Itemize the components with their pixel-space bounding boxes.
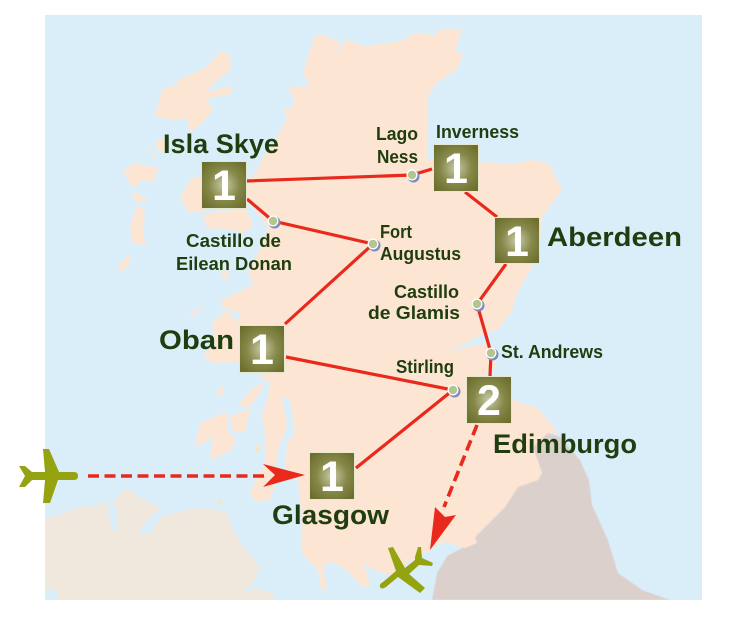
label: Lago Ness	[376, 124, 418, 167]
label: Castillo de Eilean Donan: Eilean Donan	[176, 254, 292, 274]
night badge: Inverness: 1	[444, 145, 468, 193]
dashed flight arrow: departure	[430, 425, 477, 550]
label: Castillo de Glamis: de Glamis	[368, 303, 460, 323]
land: small islands	[215, 441, 260, 505]
land: Scottish mainland	[222, 29, 562, 595]
land: Colonsay	[217, 383, 225, 397]
marker: Castillo de Eilean Donan	[268, 216, 280, 228]
land: small isles	[147, 138, 229, 317]
marker: Castillo de Glamis	[472, 298, 484, 312]
night badge: Edimburgo: 2	[477, 377, 501, 425]
night badge: Glasgow	[310, 452, 354, 501]
night badge: Isla Skye: 1	[212, 162, 236, 210]
night badge: Edimburgo	[466, 376, 512, 425]
marker: Fort Augustus	[368, 238, 380, 252]
stop markers	[268, 170, 498, 398]
label: Isla Skye: Isla Skye	[163, 129, 279, 159]
label: Stirling: Stirling	[396, 357, 454, 377]
label: Castillo de Glamis: Castillo	[394, 282, 459, 302]
label: Lago Ness: Ness	[377, 147, 418, 167]
land: Lewis island	[153, 50, 232, 132]
label: Inverness: Inverness	[436, 122, 519, 142]
icon: arriving plane	[19, 449, 78, 503]
label: Aberdeen: Aberdeen	[547, 222, 682, 252]
land: Outer Hebrides	[118, 163, 159, 272]
marker: St. Andrews	[486, 348, 498, 360]
label: Fort Augustus: Augustus	[380, 244, 461, 264]
land: northern England	[432, 433, 670, 600]
night badge: Oban: 1	[250, 326, 274, 374]
label: Fort Augustus: Fort	[380, 222, 412, 242]
land: Jura	[238, 383, 262, 407]
label: Lago Ness: Lago	[376, 124, 418, 144]
night badge: Aberdeen: 1	[505, 218, 529, 266]
label: Edimburgo: Edimburgo	[493, 429, 637, 459]
label: Castillo de Eilean Donan: Castillo de	[186, 231, 281, 251]
land: Ireland	[45, 488, 273, 600]
icon: departing plane	[380, 547, 433, 593]
night badge: Aberdeen	[494, 218, 540, 266]
land: Skye west	[180, 177, 205, 212]
dashed flight arrow: arrival	[88, 464, 305, 487]
route lines	[246, 169, 506, 468]
night badge: Inverness	[434, 144, 478, 193]
label: Fort Augustus	[380, 222, 461, 264]
label: Glasgow: Glasgow	[272, 500, 390, 530]
night badge: Glasgow: 1	[320, 453, 344, 501]
marker: Stirling	[448, 384, 460, 398]
label: Oban: Oban	[159, 325, 234, 355]
land masses	[45, 29, 670, 600]
land: Mull	[203, 310, 240, 363]
label: St. Andrews: St. Andrews	[501, 342, 603, 362]
land: Skye south strip	[203, 209, 253, 233]
land: Islay	[195, 408, 250, 460]
label: Castillo de Glamis	[368, 282, 460, 323]
night badge: Isla Skye	[202, 162, 246, 210]
marker: Lago Ness	[406, 170, 420, 182]
night badge: Oban	[240, 326, 284, 374]
label: Castillo de Eilean Donan	[176, 231, 292, 274]
